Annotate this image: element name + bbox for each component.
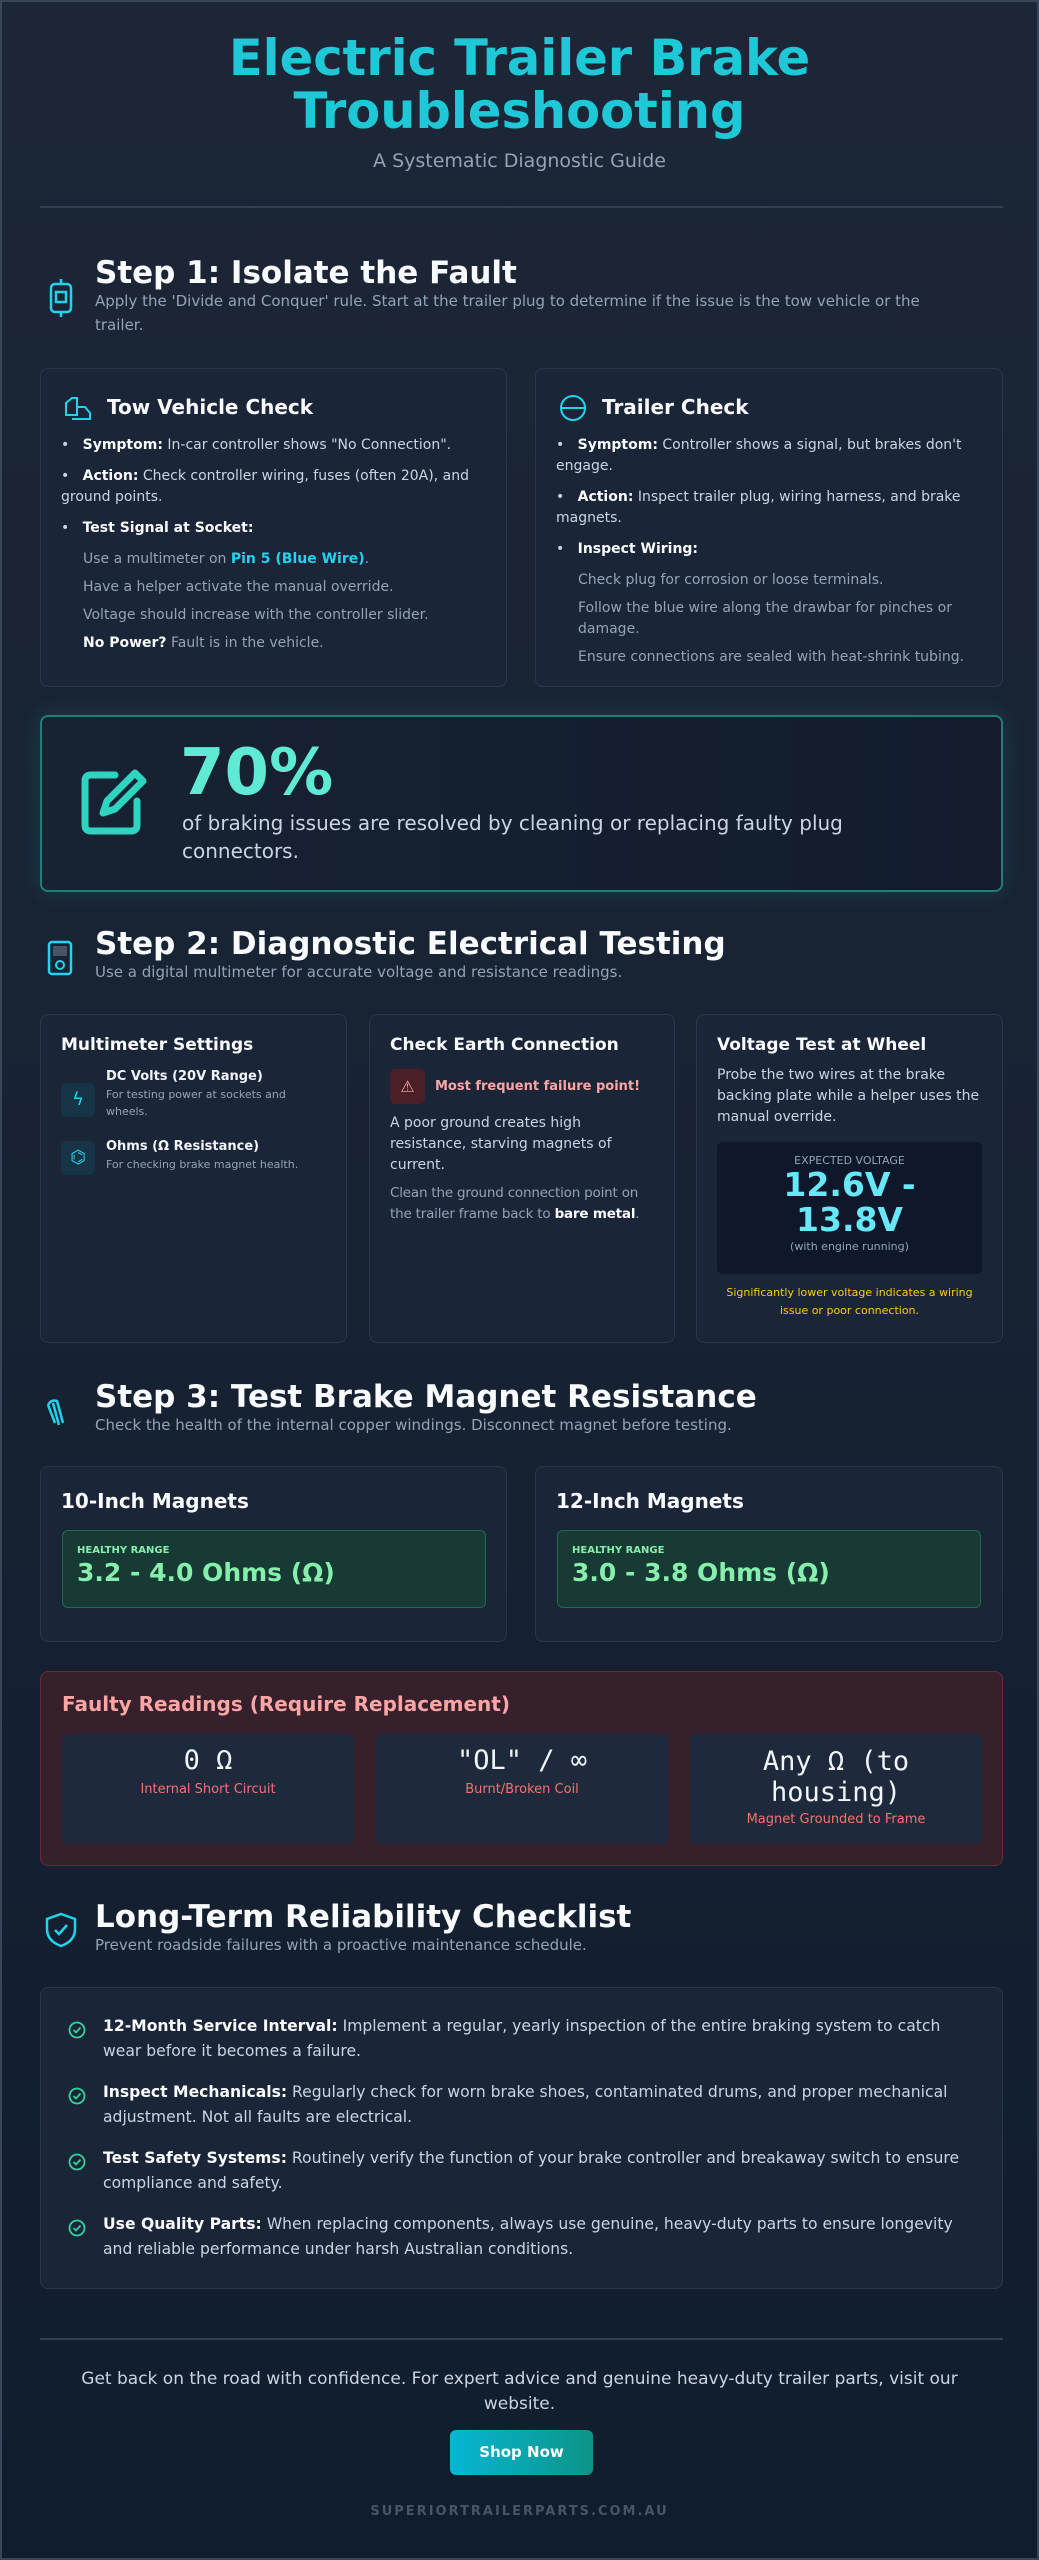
panel: voltage test: Significantly lower voltage indicates a wiring issue or poor connection.	[726, 1286, 973, 1317]
expected voltage box: 12.6V -	[783, 1165, 916, 1204]
panel: voltage test	[696, 1014, 1003, 1343]
panel: tow vehicle check: Use a multimeter on Pin 5 (Blue Wire).	[83, 551, 369, 567]
panel: 10-inch magnets: 10-Inch Magnets	[61, 1489, 249, 1513]
button: shop now: Shop Now	[479, 2443, 564, 2461]
panel: trailer check: Trailer Check	[602, 395, 749, 419]
panel: 10-inch magnets	[40, 1466, 507, 1642]
item: ohms: For checking brake magnet health.	[106, 1158, 298, 1171]
heading: step 3	[95, 1379, 757, 1434]
panel: trailer check: • Action: Inspect trailer plug, wiring harness, and brake magnets.	[556, 489, 961, 526]
panel: tow vehicle check: No Power? Fault is in the vehicle.	[83, 635, 324, 651]
healthy range: HEALTHY RANGE	[77, 1545, 169, 1556]
healthy range: HEALTHY RANGE	[572, 1545, 664, 1556]
icon: edit	[82, 770, 146, 834]
panel: trailer check: • Symptom: Controller shows a signal, but brakes don't engage.	[556, 437, 962, 474]
panel: tow vehicle check: • Symptom: In-car controller shows "No Connection".	[61, 437, 451, 453]
warning badge: ⚠	[400, 1077, 415, 1096]
item 4	[68, 2215, 953, 2258]
reading: any ohm to housing: Magnet Grounded to Frame	[747, 1812, 925, 1827]
panel: faulty readings	[40, 1671, 1003, 1866]
heading: step 2	[95, 926, 726, 981]
expected voltage box: 13.8V	[796, 1200, 903, 1239]
panel: voltage test: Voltage Test at Wheel	[717, 1035, 926, 1055]
icon: car	[65, 397, 91, 420]
expected voltage box: (with engine running)	[790, 1240, 909, 1253]
reading: any ohm to housing: Any Ω (to	[763, 1746, 909, 1777]
panel: multimeter settings: Multimeter Settings	[61, 1035, 253, 1055]
healthy range	[62, 1530, 486, 1608]
panel: tow vehicle check: Have a helper activate the manual override.	[83, 579, 394, 595]
panel: 12-inch magnets	[535, 1466, 1003, 1642]
heading: step 3: Step 3: Test Brake Magnet Resistance	[95, 1379, 757, 1415]
heading: checklist: Prevent roadside failures with a proactive maintenance schedule.	[95, 1936, 587, 1954]
panel: voltage test: Probe the two wires at the brake backing plate while a helper uses the manual override.	[717, 1067, 979, 1125]
heading: step 1: Apply the 'Divide and Conquer' rule. Start at the trailer plug to determine if the issue is the tow vehicle or the trailer.	[95, 292, 920, 334]
panel: earth connection: A poor ground creates high resistance, starving magnets of current.	[390, 1115, 612, 1173]
item 1	[68, 2017, 940, 2060]
item: ohms	[61, 1139, 298, 1175]
healthy range: 3.0 - 3.8 Ohms (Ω)	[572, 1558, 830, 1587]
panel: checklist: 12-Month Service Interval: Implement a regular, yearly inspection of the entire braking system to catch wear before it becomes a failure.	[103, 2017, 940, 2060]
icon: multimeter	[48, 940, 72, 976]
panel: tow vehicle check: • Action: Check controller wiring, fuses (often 20A), and ground points.	[61, 468, 469, 505]
panel: earth connection	[369, 1014, 675, 1343]
panel: trailer check: Follow the blue wire along the drawbar for pinches or damage.	[578, 600, 952, 637]
panel: 12-inch magnets: 12-Inch Magnets	[556, 1489, 744, 1513]
item 3	[68, 2149, 959, 2192]
panel: earth connection: Check Earth Connection	[390, 1035, 619, 1055]
reading: any ohm to housing	[690, 1734, 982, 1844]
title: Troubleshooting	[294, 82, 745, 140]
item: dc volts: For testing power at sockets and wheels.	[106, 1088, 286, 1118]
panel: trailer check: Check plug for corrosion or loose terminals.	[578, 572, 883, 588]
reading: 0 ohm	[62, 1734, 354, 1844]
item 2	[68, 2083, 947, 2126]
heading: step 1: Step 1: Isolate the Fault	[95, 255, 517, 291]
heading: step 3: Check the health of the internal copper windings. Disconnect magnet before testing.	[95, 1416, 732, 1434]
panel: tow vehicle check: Tow Vehicle Check	[107, 395, 313, 419]
panel: tow vehicle check: • Test Signal at Socket:	[61, 520, 253, 536]
footer domain: SUPERIORTRAILERPARTS.COM.AU	[370, 2504, 669, 2519]
expected voltage box	[717, 1142, 982, 1274]
callout: 70% stat	[40, 715, 1003, 892]
item: ohms: ⌬	[70, 1147, 86, 1168]
heading: checklist	[95, 1899, 631, 1954]
icon: trailer	[560, 395, 586, 421]
panel: trailer check: • Inspect Wiring:	[556, 541, 698, 557]
heading: step 2: Step 2: Diagnostic Electrical Testing	[95, 926, 726, 962]
callout: 70% stat: 70%	[180, 736, 333, 810]
icon: plug	[50, 279, 72, 317]
item: dc volts: DC Volts (20V Range)	[106, 1069, 263, 1084]
panel: checklist: Inspect Mechanicals: Regularly check for worn brake shoes, contaminated drums, and proper mechanical adjustment. Not all faults are electrical.	[103, 2083, 947, 2126]
reading: OL: "OL" / ∞	[457, 1745, 587, 1776]
panel: checklist	[40, 1987, 1003, 2289]
button: shop now	[450, 2430, 593, 2475]
icon: shield	[46, 1912, 76, 1948]
reading: 0 ohm: 0 Ω	[184, 1745, 232, 1776]
reading: OL	[376, 1734, 668, 1844]
heading: step 1	[95, 255, 920, 334]
panel: tow vehicle check: Voltage should increase with the controller slider.	[83, 607, 429, 623]
icon: magnet	[46, 1399, 64, 1426]
panel: tow vehicle check	[40, 368, 507, 687]
item: ohms: Ohms (Ω Resistance)	[106, 1139, 259, 1154]
warning badge	[390, 1069, 640, 1104]
footer text: Get back on the road with confidence. For expert advice and genuine heavy-duty trailer parts, visit our website.	[81, 2369, 958, 2414]
panel: faulty readings: Faulty Readings (Require Replacement)	[62, 1692, 510, 1716]
panel: trailer check: Ensure connections are sealed with heat-shrink tubing.	[578, 649, 964, 665]
title	[229, 29, 810, 140]
panel: trailer check	[535, 368, 1003, 687]
warning badge: Most frequent failure point!	[435, 1079, 640, 1094]
healthy range: 3.2 - 4.0 Ohms (Ω)	[77, 1558, 335, 1587]
panel: multimeter settings	[40, 1014, 347, 1343]
item: dc volts	[61, 1069, 286, 1118]
callout: 70% stat: of braking issues are resolved by cleaning or replacing faulty plug connectors.	[182, 811, 843, 863]
heading: checklist: Long-Term Reliability Checklist	[95, 1899, 631, 1935]
reading: 0 ohm: Internal Short Circuit	[140, 1782, 276, 1797]
reading: OL: Burnt/Broken Coil	[465, 1782, 579, 1797]
item: dc volts: ϟ	[72, 1089, 84, 1110]
healthy range	[557, 1530, 981, 1608]
panel: checklist: Use Quality Parts: When replacing components, always use genuine, heavy-duty parts to ensure longevity and reliable performance under harsh Australian conditions.	[103, 2215, 953, 2258]
subtitle: A Systematic Diagnostic Guide	[373, 150, 666, 172]
reading: any ohm to housing: housing)	[771, 1777, 901, 1808]
expected voltage box: EXPECTED VOLTAGE	[794, 1154, 905, 1167]
heading: step 2: Use a digital multimeter for accurate voltage and resistance readings.	[95, 963, 622, 981]
panel: earth connection: Clean the ground connection point on the trailer frame back to bare metal.	[390, 1185, 639, 1222]
title: Electric Trailer Brake	[229, 29, 810, 87]
panel: checklist: Test Safety Systems: Routinely verify the function of your brake controller and breakaway switch to ensure compliance and safety.	[103, 2149, 959, 2192]
